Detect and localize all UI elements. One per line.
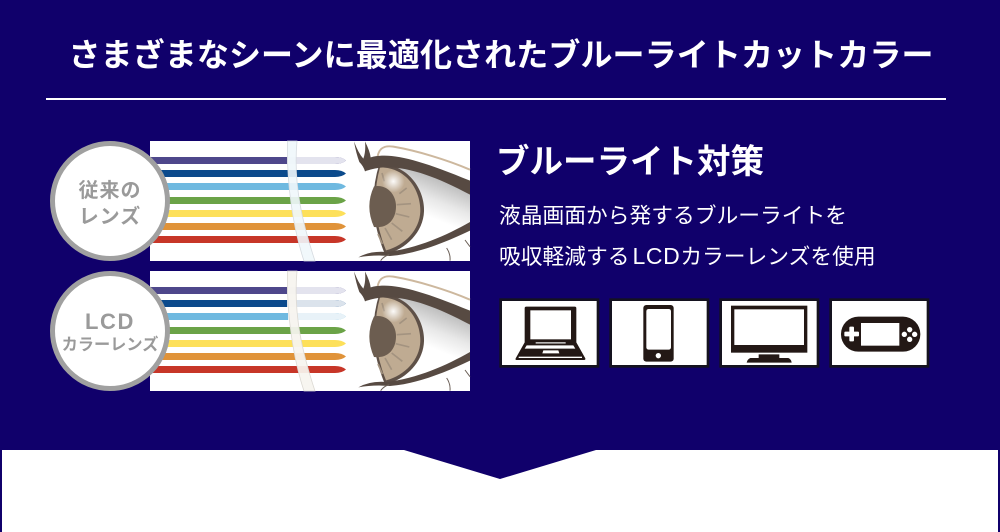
description text: 吸収軽減するLCDカラーレンズを使用: [499, 243, 876, 269]
badge label: LCD: カラーレンズ: [62, 336, 158, 354]
panel: LCD colour lens: [150, 271, 470, 391]
eye: [354, 271, 470, 391]
panel: conventional lens: [150, 141, 470, 261]
badge label: conventional: レンズ: [79, 206, 141, 228]
badge label: conventional: 従来の: [78, 180, 142, 202]
light rays: [150, 157, 346, 243]
badge circle: LCD: [52, 274, 168, 388]
description text: [499, 203, 876, 269]
badge label: LCD: [62, 309, 158, 354]
icon: laptop: [501, 300, 598, 366]
lens cross-section: [287, 141, 315, 261]
icon: television: [721, 300, 818, 366]
bottom white panel with arrow notch: [2, 450, 998, 532]
tinted lens cross-section: [287, 271, 315, 391]
badge circle: conventional: [52, 144, 168, 258]
eye: [354, 141, 470, 261]
icon: handheld game console: [831, 300, 928, 366]
icon: smartphone: [611, 300, 708, 366]
heading: ブルーライト対策: [496, 144, 764, 181]
badge label: conventional: [78, 180, 142, 228]
badge label: LCD: LCD: [85, 309, 135, 334]
device icons: [501, 300, 928, 366]
description text: 液晶画面から発するブルーライトを: [499, 203, 847, 228]
filtered light rays: [150, 287, 346, 373]
title: さまざまなシーンに最適化されたブルーライトカットカラー: [68, 37, 934, 73]
